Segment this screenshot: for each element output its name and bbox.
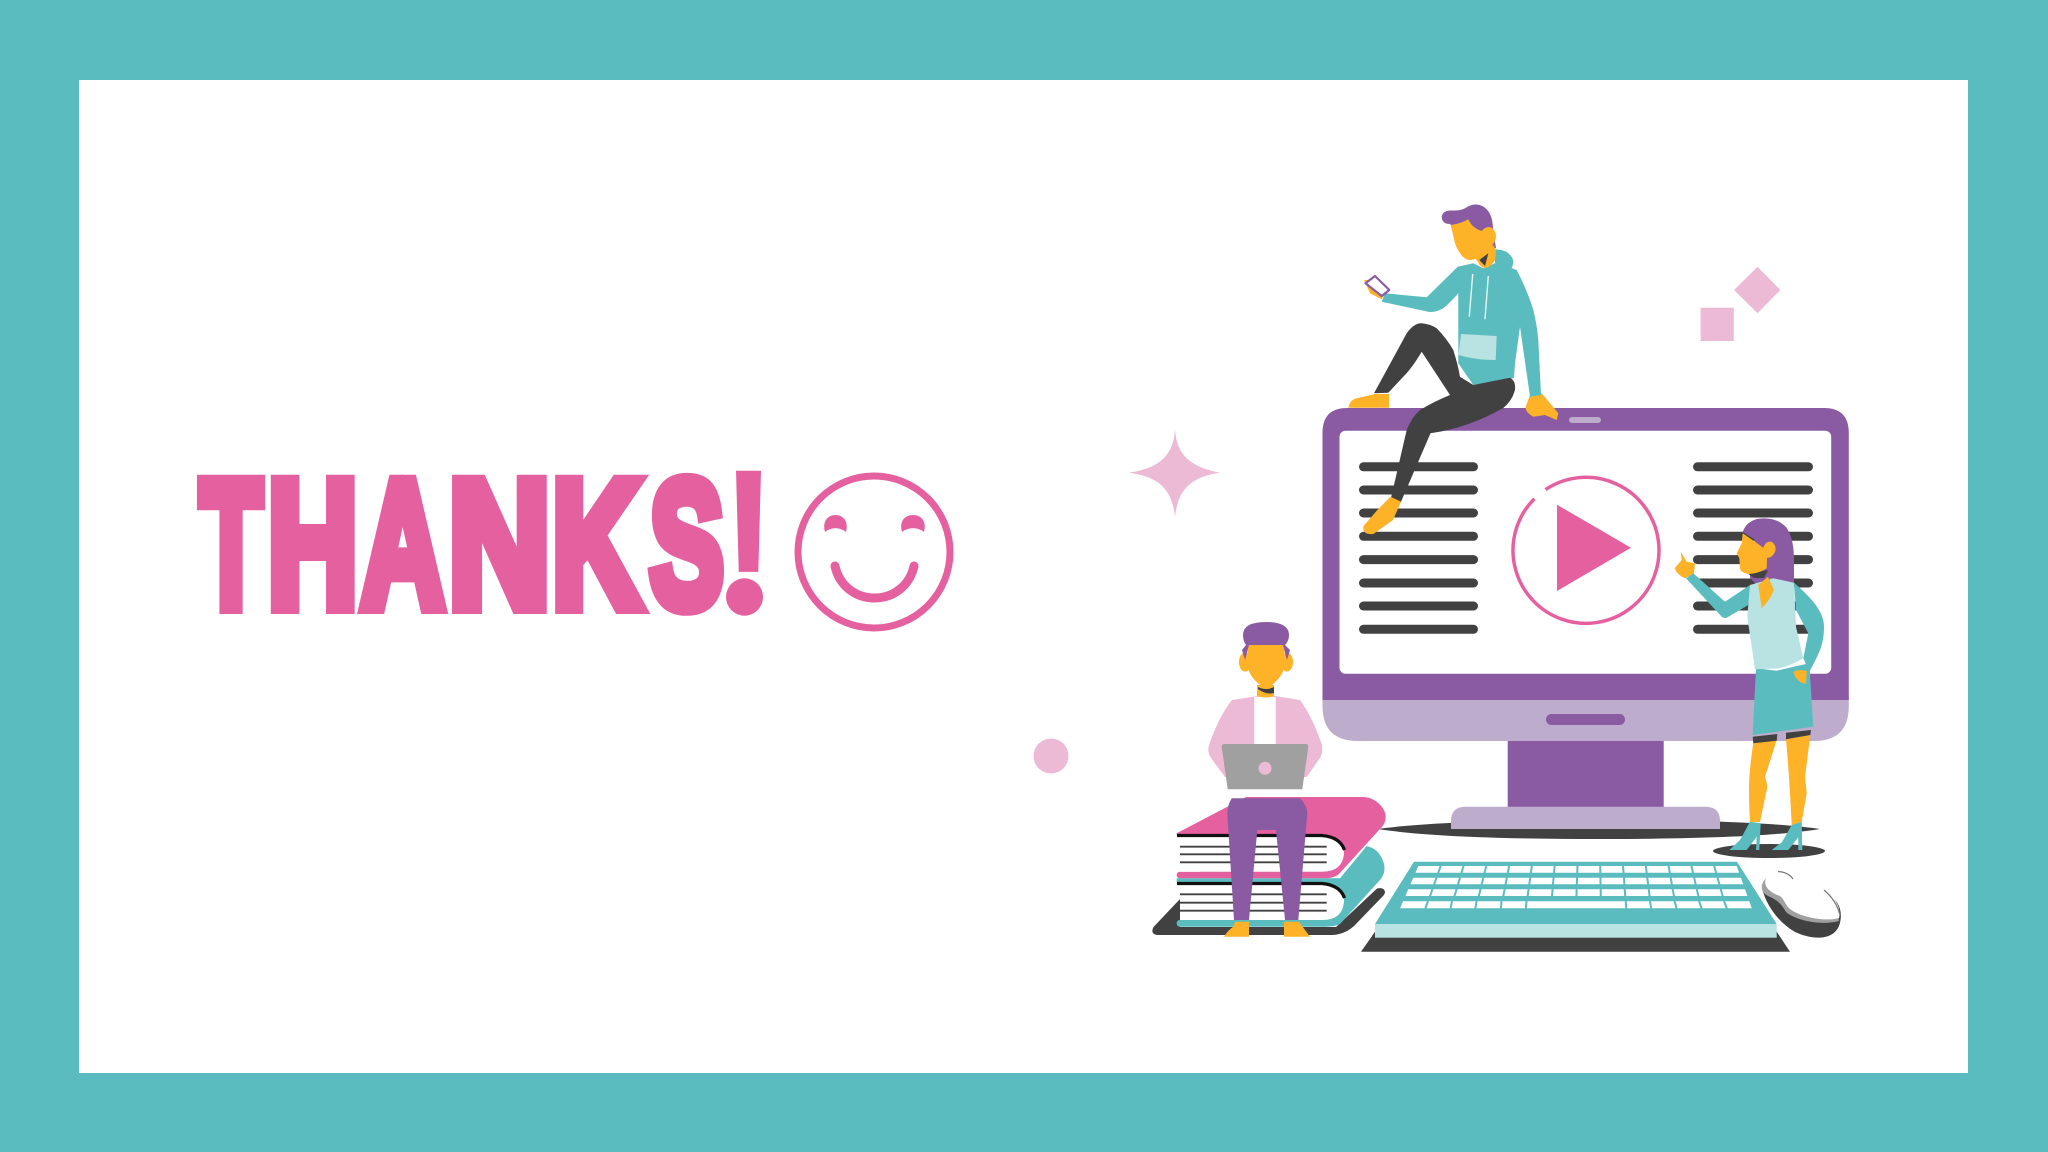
title: THANKS!: H: [268, 445, 358, 645]
neck: [1257, 685, 1274, 698]
neck: [1475, 245, 1496, 268]
book shadow: [1152, 888, 1385, 935]
title: THANKS!: K: [552, 445, 641, 645]
webcam: [1569, 417, 1601, 423]
ears: [1239, 652, 1293, 672]
monitor: [1322, 408, 1849, 829]
skirt: [1753, 663, 1813, 735]
phone hand: [1364, 280, 1385, 299]
mouse side: [1762, 878, 1839, 923]
keyboard shadow: [1361, 932, 1790, 952]
laptop logo: [1258, 762, 1272, 775]
title: THANKS!: T: [200, 445, 262, 645]
collar: [1479, 253, 1488, 266]
chin slot: [1546, 714, 1625, 725]
teal book pages: [1180, 884, 1344, 920]
pink book page lines: [1180, 847, 1327, 862]
hoodie pocket: [1458, 334, 1497, 360]
monitor chin: [1322, 695, 1849, 741]
mouse: [1762, 870, 1841, 938]
trousers: [1227, 798, 1307, 920]
laptop: [1222, 744, 1308, 789]
pointing hand: [1675, 552, 1695, 578]
shirt: [1254, 697, 1276, 745]
keyboard deck: [1375, 862, 1777, 924]
hair: [1442, 204, 1496, 250]
person: standing woman: [1675, 518, 1824, 850]
front foot: [1363, 497, 1401, 534]
title: THANKS!: S: [650, 445, 724, 645]
text lines right: [1693, 462, 1813, 634]
blouse: [1747, 578, 1803, 669]
keyboard: [1361, 862, 1790, 952]
hand on monitor: [1526, 393, 1558, 420]
mouse highlight arcs: [1778, 872, 1840, 915]
mouse base: [1762, 885, 1841, 938]
face: [1247, 643, 1285, 688]
legs: [1374, 323, 1515, 502]
collar: [1258, 687, 1274, 694]
hair back: [1743, 518, 1794, 585]
text lines left: [1359, 462, 1478, 634]
monitor bezel: [1322, 408, 1849, 700]
phone: [1366, 276, 1389, 296]
title: THANKS!: N: [449, 445, 550, 645]
garters: [1753, 730, 1811, 743]
screen: [1340, 431, 1831, 674]
woman shadow: [1713, 844, 1825, 858]
teal book page lines: [1180, 894, 1327, 911]
monitor base: [1451, 807, 1720, 829]
title: THANKS!: A: [361, 445, 444, 645]
icon: smiley face: [798, 476, 950, 628]
back foot: [1348, 394, 1389, 408]
jacket: [1208, 696, 1322, 777]
hoodie: [1382, 249, 1541, 397]
keyboard front edge: [1375, 924, 1777, 938]
legs: [1749, 735, 1810, 825]
pink book edge: [1177, 836, 1344, 850]
pink book pages: [1180, 836, 1344, 872]
decorative sparkle: [1129, 428, 1220, 517]
face: [1737, 533, 1776, 574]
title: THANKS!: !: [720, 425, 778, 660]
play triangle: [1557, 505, 1631, 591]
feet: [1224, 922, 1310, 937]
decorative dot: [1034, 738, 1068, 774]
key dividers: [1425, 865, 1727, 909]
teal book edge: [1177, 884, 1344, 898]
face: [1451, 219, 1496, 260]
person: seated man with laptop: [1208, 622, 1322, 937]
hair: [1242, 622, 1290, 660]
play button ring: [1513, 477, 1659, 623]
pink book cover: [1177, 797, 1386, 878]
shoes: [1729, 822, 1802, 850]
person: man sitting on monitor: [1348, 204, 1558, 534]
collar: [1748, 570, 1768, 578]
book stack: [1152, 797, 1386, 935]
decorative diamond and square: [1701, 267, 1780, 341]
teal book cover: [1177, 846, 1384, 927]
neckline: [1758, 577, 1774, 608]
far arm: [1794, 583, 1824, 672]
title: THANKS!: [196, 470, 763, 616]
mouse top: [1765, 870, 1840, 919]
hoodie strings: [1469, 274, 1488, 319]
key rows: [1400, 866, 1752, 908]
monitor neck: [1508, 735, 1664, 807]
hip hand: [1793, 670, 1807, 684]
monitor shadow: [1378, 820, 1820, 839]
pointing arm: [1686, 573, 1750, 618]
